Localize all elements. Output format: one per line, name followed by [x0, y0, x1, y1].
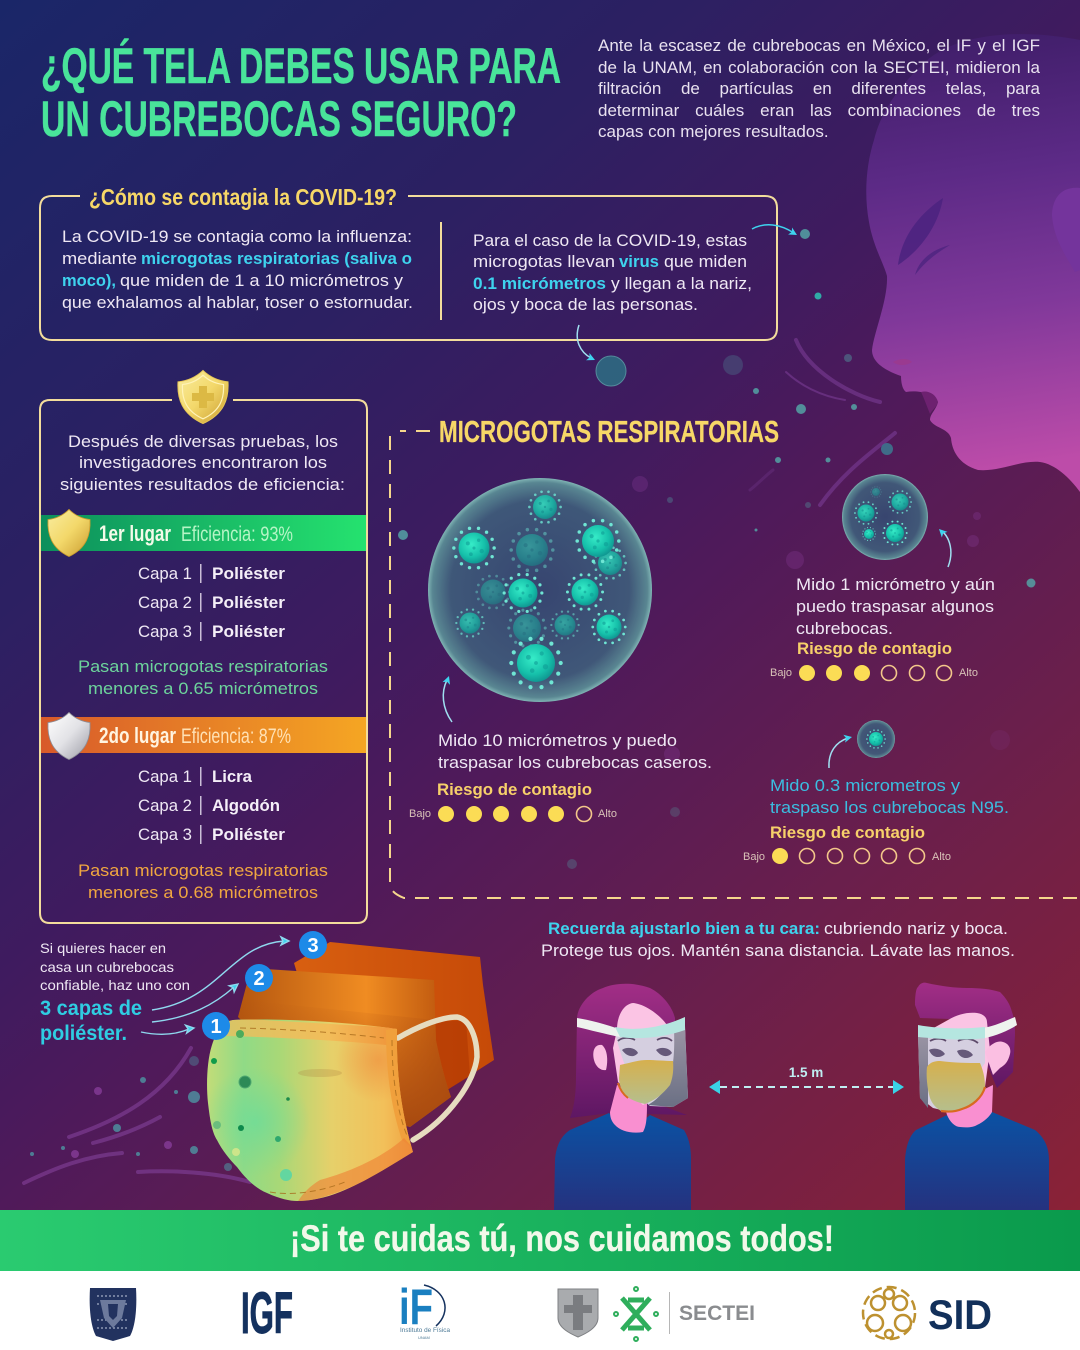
text block: virus size: y llegan a la nariz, — [611, 274, 752, 293]
text block: introduction: filtración de partículas en diferentes telas, para — [598, 79, 1040, 98]
text block: virus size: Para el caso de la COVID-19, estas — [473, 231, 747, 250]
exhaled droplet particles — [398, 229, 1036, 869]
icon: 0.3 micrometer droplet — [857, 720, 895, 758]
first place bar: 1er lugar — [99, 521, 171, 546]
text block: homemade mask advice: confiable, haz uno con — [40, 977, 190, 993]
text block: 1 micrometer — [796, 575, 995, 638]
badge 1 — [202, 1012, 230, 1040]
face shield glass — [616, 1026, 688, 1107]
first place note: menores a 0.65 micrómetros — [88, 679, 318, 698]
second place note — [78, 861, 328, 902]
logo: SECTEI — [669, 1292, 755, 1334]
icon: gold shield — [48, 509, 90, 557]
second place layers: Capa 3 — [138, 825, 192, 844]
logo: IF: iF — [399, 1279, 433, 1335]
risk meter: 0.3 micrometers: Riesgo de contagio — [770, 823, 925, 842]
text block: 1 micrometer: Mido 1 micrómetro y aún — [796, 575, 995, 594]
neck — [610, 1085, 647, 1133]
text block: 0.3 micrometers: Mido 0.3 micrometros y — [770, 776, 961, 795]
text block: intro to results: Después de diversas pruebas, los — [68, 432, 338, 451]
layer 3 — [294, 942, 494, 1100]
second place bar — [41, 712, 366, 760]
badge 2: 2 — [253, 968, 265, 990]
layer 2 — [238, 968, 451, 1127]
heading: how it spreads: ¿Cómo se contagia la COVID-19? — [89, 184, 397, 210]
second place layers — [138, 767, 285, 844]
risk meter: 0.3 micrometers: Bajo — [743, 851, 765, 863]
ear — [985, 1041, 1010, 1075]
first place bar: Eficiencia: 93% — [181, 523, 293, 546]
face — [925, 1013, 990, 1112]
text block: virus size: 0.1 micrómetros — [473, 274, 606, 293]
icon: 10 micrometer droplet — [428, 478, 652, 702]
risk meter: 1 micrometer — [770, 639, 978, 681]
first place layers: Poliéster — [212, 593, 285, 612]
badge 2 — [245, 964, 273, 992]
second place layers: Capa 2 — [138, 796, 192, 815]
text block: 10 micrometers: Mido 10 micrómetros y puedo — [438, 731, 677, 750]
text block: reminder: cubriendo nariz y boca. — [824, 919, 1008, 938]
face mask — [927, 1061, 985, 1112]
layer 1 — [207, 1020, 413, 1201]
face shield glass — [918, 1035, 985, 1112]
second place note: menores a 0.68 micrómetros — [88, 883, 318, 902]
first place layers: Capa 3 — [138, 622, 192, 641]
text block: introduction: Ante la escasez de cubrebocas en México, el IF y el IGF — [598, 36, 1040, 55]
text block: introduction — [598, 36, 1040, 141]
icon: shield with plus — [178, 370, 228, 424]
second place bar: 2do lugar — [99, 723, 176, 748]
banner: slogan: ¡Si te cuidas tú, nos cuidamos todos! — [290, 1218, 834, 1259]
ear loop — [398, 1017, 477, 1140]
risk meter: 1 micrometer: Bajo — [770, 667, 792, 679]
text block: virus size: que miden — [664, 252, 747, 271]
illustration: woman with mask and face shield — [554, 984, 691, 1210]
icon: 1 micrometer droplet — [842, 474, 928, 560]
logo: IF: Instituto de Física — [400, 1328, 451, 1334]
risk meter: 10 micrometers: Bajo — [409, 808, 431, 820]
text block: homemade mask advice: casa un cubrebocas — [40, 959, 174, 975]
shirt — [905, 1112, 1049, 1210]
logo: SID: SID — [928, 1291, 992, 1338]
badge 3: 3 — [307, 935, 319, 957]
risk meter: 0.3 micrometers: Alto — [932, 851, 951, 863]
first place note: Pasan microgotas respiratorias — [78, 657, 328, 676]
text block: virus size — [473, 231, 752, 314]
first place layers: Capa 2 — [138, 593, 192, 612]
logo: IGF: IGF — [241, 1281, 293, 1346]
logo: CDMX shield — [558, 1289, 598, 1337]
text block: intro to results — [60, 432, 345, 494]
eyes — [622, 1048, 672, 1056]
arrow: to small particle top — [752, 225, 799, 238]
footer: logos — [0, 1271, 1080, 1350]
shield band — [983, 1017, 1017, 1038]
logo: SECTEI: SECTEI — [679, 1302, 755, 1325]
badge 1: 1 — [210, 1016, 222, 1038]
text block: homemade mask advice — [40, 940, 190, 1045]
text block: intro to results: investigadores encontraron los — [79, 453, 327, 472]
first place layers: Capa 1 — [138, 564, 192, 583]
risk meter: 1 micrometer: Alto — [959, 667, 978, 679]
text block: droplets: microgotas respiratorias (saliva o — [141, 249, 412, 268]
risk meter: 1 micrometer: Riesgo de contagio — [797, 639, 952, 658]
second place layers: Capa 1 — [138, 767, 192, 786]
text block: droplets: que exhalamos al hablar, toser o estornudar. — [62, 293, 413, 312]
risk meter: 10 micrometers: Riesgo de contagio — [437, 780, 592, 799]
second place layers: Poliéster — [212, 825, 285, 844]
illustration: exhaling face — [866, 34, 1080, 492]
panel: how COVID-19 spreads — [40, 184, 777, 340]
illustration: three-layer mask — [200, 942, 494, 1205]
text block: introduction: determinar cuáles eran las combinaciones de tres — [598, 101, 1040, 120]
title: UN CUBREBOCAS SEGURO? — [41, 91, 517, 147]
text block: reminder: Protege tus ojos. Mantén sana distancia. Lávate las manos. — [541, 941, 1015, 960]
hair — [915, 983, 1015, 1088]
eyes — [929, 1049, 973, 1058]
text block: introduction: de la UNAM, en colaboración con la SECTEI, midieron la — [598, 58, 1040, 77]
face — [613, 1003, 673, 1105]
text block: homemade mask advice: Si quieres hacer en — [40, 940, 166, 956]
title — [41, 38, 561, 147]
logo: CDMX knot — [614, 1287, 658, 1341]
text block: reminder: Recuerda ajustarlo bien a tu cara: — [548, 919, 820, 938]
first place layers — [138, 564, 285, 641]
logo: SID — [863, 1287, 992, 1339]
text block: 10 micrometers: traspasar los cubrebocas caseros. — [438, 753, 712, 772]
text block: intro to results: siguientes resultados de eficiencia: — [60, 475, 345, 494]
second place layers: Licra — [212, 767, 253, 786]
risk meter: 0.3 micrometers — [743, 823, 951, 864]
text block: homemade mask advice: poliéster. — [40, 1022, 127, 1045]
hair — [570, 984, 687, 1118]
text block: virus size: virus — [619, 252, 659, 271]
arrow: 1.5 m distance: 1.5 m — [789, 1065, 823, 1080]
logo: IF: UNAM — [418, 1335, 430, 1340]
neck — [945, 1085, 993, 1127]
text block: 0.3 micrometers — [770, 776, 1009, 817]
text block: introduction: capas con mejores resultados. — [598, 122, 829, 141]
arrow: to 1 micrometer droplet — [936, 526, 951, 567]
second place note: Pasan microgotas respiratorias — [78, 861, 328, 880]
text block: homemade mask advice: 3 capas de — [40, 997, 142, 1020]
risk meter: 10 micrometers: Alto — [598, 808, 617, 820]
shirt — [554, 1113, 691, 1210]
face mask — [619, 1060, 673, 1104]
text block: 10 micrometers — [438, 731, 712, 772]
text block: droplets: La COVID-19 se contagia como la influenza: — [62, 227, 412, 246]
logo: UNAM — [90, 1288, 136, 1341]
first place bar — [41, 509, 366, 557]
ear — [593, 1045, 607, 1070]
heading: droplets: MICROGOTAS RESPIRATORIAS — [439, 414, 779, 449]
droplets near mask — [30, 1056, 232, 1171]
text block: droplets: mediante — [62, 249, 137, 268]
text block: droplets: moco), — [62, 271, 116, 290]
text block: virus size: microgotas llevan — [473, 252, 615, 271]
panel: efficiency results — [40, 370, 367, 923]
text block: 0.3 micrometers: traspaso los cubrebocas N95. — [770, 798, 1009, 817]
badge 3 — [299, 931, 327, 959]
text block: 1 micrometer: cubrebocas. — [796, 619, 893, 638]
exhaled streaks near mask — [24, 1048, 250, 1183]
text block: droplets — [62, 227, 413, 312]
first place layers: Poliéster — [212, 564, 285, 583]
icon: silver shield — [48, 712, 90, 760]
text block: droplets: que miden de 1 a 10 micrómetros y — [120, 271, 404, 290]
text block: reminder — [541, 919, 1015, 960]
banner: slogan — [0, 1210, 1080, 1271]
second place layers: Algodón — [212, 796, 280, 815]
arrow: 1.5 m distance — [709, 1065, 904, 1094]
text block: 1 micrometer: puedo traspasar algunos — [796, 597, 994, 616]
arrow: to 0.3 micrometer droplet — [829, 733, 853, 768]
arrow: to droplet — [577, 325, 597, 364]
illustration: man with mask and face shield — [905, 983, 1049, 1210]
arrow: to large droplet — [443, 675, 453, 722]
arrows: to mask layers — [141, 937, 289, 1034]
second place bar: Eficiencia: 87% — [181, 725, 291, 748]
title: ¿QUÉ TELA DEBES USAR PARA — [41, 38, 561, 94]
first place note — [78, 657, 328, 698]
shield band — [577, 1018, 622, 1037]
text block: virus size: ojos y boca de las personas. — [473, 295, 698, 314]
first place layers: Poliéster — [212, 622, 285, 641]
panel: respiratory droplets — [390, 414, 1080, 898]
risk meter: 10 micrometers — [409, 780, 617, 822]
